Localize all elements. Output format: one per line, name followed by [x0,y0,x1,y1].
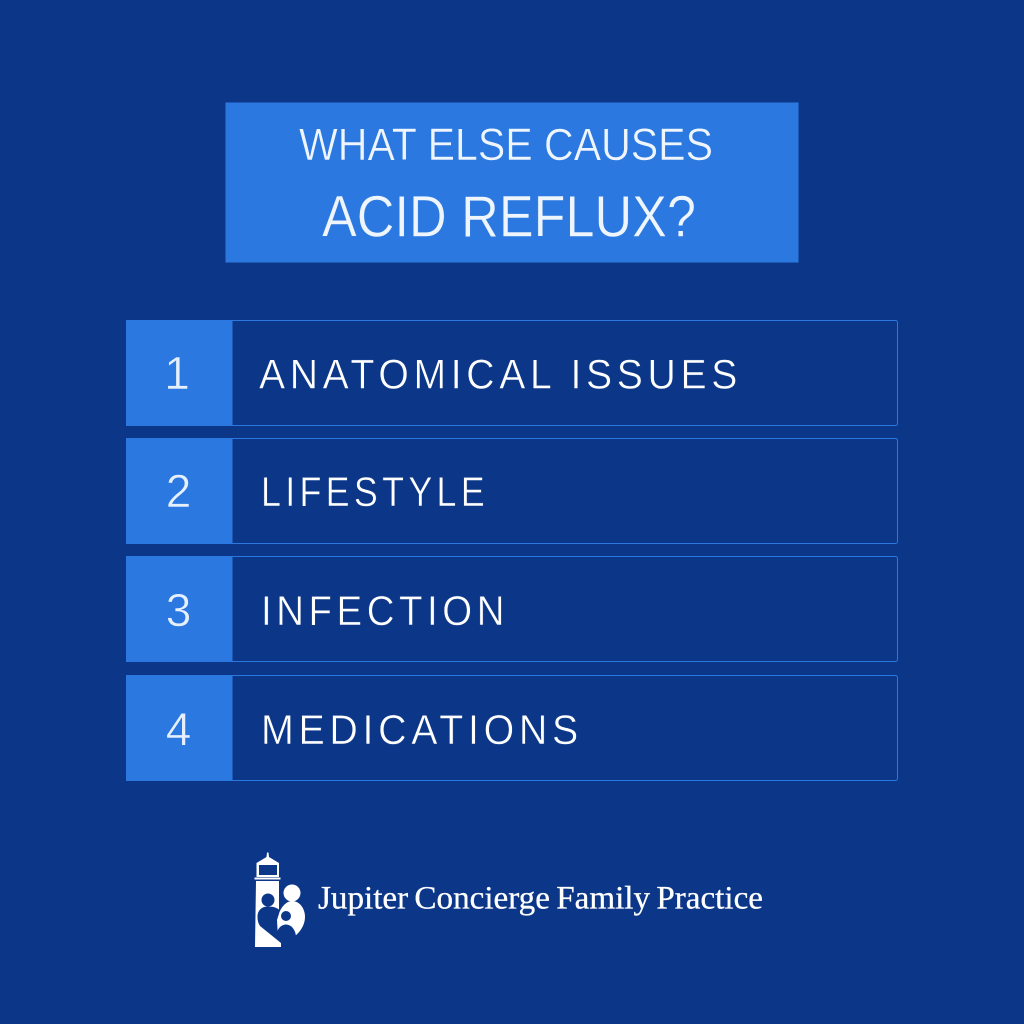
label 3: INFECTION [261,587,509,634]
logo wordmark: Jupiter Concierge Family Practice [318,880,763,916]
number 3: 3 [166,584,191,636]
label 4: MEDICATIONS [261,706,583,753]
title banner [226,102,798,262]
label 1: ANATOMICAL ISSUES [259,350,742,398]
list row 3 [126,556,898,662]
number 2: 2 [166,465,191,517]
number 1: 1 [164,347,190,399]
number 4: 4 [166,703,191,755]
label 2: LIFESTYLE [261,468,489,515]
list row 2 [126,438,898,544]
title line 1: WHAT ELSE CAUSES [299,119,713,170]
logo [254,852,763,947]
list row 1 [126,320,898,426]
icon: lighthouse and family [254,852,305,947]
title line 2: ACID REFLUX? [322,184,696,250]
list row 4 [126,675,898,781]
